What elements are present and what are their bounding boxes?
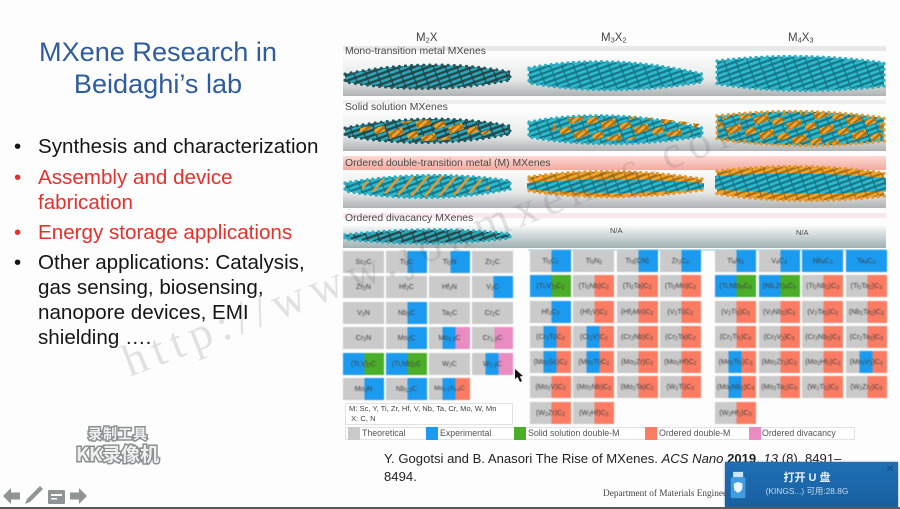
element grid: M4X3: (Nb,Zr)4C3 bbox=[762, 282, 796, 291]
element grid: M2X: W1.3C bbox=[483, 360, 502, 369]
legend: Ordered divacancy bbox=[762, 428, 836, 438]
diagonal watermark: http://www.jonmxenes.com bbox=[115, 96, 764, 386]
row 4: ordered divacancy bbox=[343, 213, 886, 248]
bullet: other applications: Other applications: Catalysis, bbox=[38, 251, 305, 274]
bottom window edge bbox=[0, 507, 900, 509]
element grid: M2X: Zr2C bbox=[485, 258, 500, 267]
slide title bbox=[39, 36, 277, 99]
N/A note M3X2: N/A bbox=[610, 226, 623, 235]
bullet: other applications: nanopore devices, EMI bbox=[38, 301, 249, 324]
element grid: M2X: Sc2C bbox=[355, 258, 372, 267]
row label: ordered double: Ordered double-transition metal (M) MXenes bbox=[345, 158, 551, 169]
slide navigation icons bbox=[3, 486, 87, 504]
column header: M3X2: M3X2 bbox=[601, 32, 627, 44]
USB popup notification bbox=[725, 462, 898, 507]
element grid: M4X3: (Mo2Ti2)C3 bbox=[719, 358, 752, 367]
element grid: M4X3: (V2Ti2)C3 bbox=[721, 308, 750, 317]
element grid: M4X3: (W2Ti2)C3 bbox=[807, 383, 838, 392]
element key note: X: C, N bbox=[351, 414, 376, 422]
slide title: Beidaghi’s lab bbox=[74, 68, 242, 99]
footer department line: Department of Materials Engineering AUBURN UNIVERSITY bbox=[603, 489, 877, 499]
citation bbox=[384, 451, 842, 484]
row 1: mono-transition metal bbox=[343, 46, 886, 96]
citation: Y. Gogotsi and B. Anasori The Rise of MXenes. ACS Nano 2019, 13 (8), 8491– bbox=[384, 451, 841, 466]
element grid: M2X: (Ti,V)2C bbox=[351, 360, 376, 369]
element grid: M3X2 bbox=[529, 249, 702, 425]
bullet: assembly: Assembly and device bbox=[38, 166, 233, 189]
element grid: M3X2: Ti3N2 bbox=[586, 257, 602, 266]
element grid: M2X: Nb1.3C bbox=[396, 385, 417, 394]
element grid: M2X: Ti2N bbox=[443, 258, 456, 267]
element grid: M3X2: (Mo2V)C2 bbox=[535, 383, 566, 392]
slide title: MXene Research in bbox=[39, 36, 277, 67]
element grid: M3X2: (Mo2Nb)C2 bbox=[577, 383, 611, 392]
icon: mouse cursor bbox=[515, 369, 523, 382]
element grid: M2X: Ta2C bbox=[442, 309, 457, 318]
element grid: M2X: Mo1.3C bbox=[438, 334, 461, 343]
legend: Solid solution double-M bbox=[528, 428, 619, 438]
element grid: M4X3: V4C3 bbox=[771, 257, 787, 266]
element grid: M3X2: (Ti2Mn)C2 bbox=[665, 282, 696, 291]
row label: mono-transition: Mono-transition metal MXenes bbox=[345, 46, 486, 57]
element grid: M2X: Nb2C bbox=[398, 309, 415, 318]
element grid: M4X3: (W2Zr2)C3 bbox=[850, 383, 882, 392]
recorder watermark bbox=[76, 424, 160, 467]
element grid: M3X2: (Mo2Ti)C2 bbox=[578, 358, 609, 367]
element grid: M4X3: (Mo2Zr2)C3 bbox=[762, 358, 797, 367]
element grid: M3X2: (Mo2Ta)C2 bbox=[621, 383, 654, 392]
bullet: assembly bbox=[14, 165, 326, 215]
element grid: M3X2: (Ti2Nb)C2 bbox=[579, 282, 609, 291]
element grid: M3X2: (Hf2Mn)C2 bbox=[621, 308, 653, 317]
icon: USB drive bbox=[730, 472, 746, 498]
bullet: assembly: fabrication bbox=[38, 191, 133, 214]
element grid: M3X2: (W2Ti)C2 bbox=[666, 383, 694, 392]
element grid: M4X3 bbox=[714, 249, 888, 425]
element grid: M2X: Mo1.3Y0.6C bbox=[434, 385, 465, 392]
popup drive info: (KINGS...) 可用:28.8G bbox=[766, 486, 848, 496]
recorder watermark: 录制工具 bbox=[88, 424, 148, 444]
element grid: M4X3: (Mo2Hf2)C3 bbox=[805, 358, 840, 367]
element grid: M4X3: (Ti2Nb2)C3 bbox=[806, 282, 839, 291]
element grid: M2X: Cr2C bbox=[485, 309, 500, 318]
element grid: M3X2: (Ti,V)3C2 bbox=[537, 282, 564, 291]
element grid: M2X: Zr2N bbox=[356, 283, 371, 292]
popup heading: 打开 U 盘 bbox=[783, 472, 831, 484]
element grid: M4X3: (Mo2Nb2)C3 bbox=[717, 383, 754, 392]
element grid: M2X: Mo2C bbox=[398, 334, 415, 343]
popup close button: ✕ bbox=[886, 464, 894, 475]
element grid: M3X2: (Cr2Nb)C2 bbox=[621, 333, 653, 342]
element grid: M4X3: (Nb2Ta2)C3 bbox=[849, 308, 884, 317]
element grid: M3X2: (W2Hf)C2 bbox=[579, 409, 608, 418]
element grid: M4X3: (Ti,Nb)4C3 bbox=[719, 282, 752, 291]
element grid: M4X3: (Mo2Ta2)C3 bbox=[761, 383, 797, 392]
element grid: M4X3: (V2Ta2)C3 bbox=[807, 308, 838, 317]
recorder watermark: KK录像机 bbox=[76, 440, 159, 467]
element grid: M2X: Hf2N bbox=[442, 283, 457, 292]
element grid: M2X: Cr1.3C bbox=[483, 334, 502, 343]
element key note: M: Sc, Y, Ti, Zr, Hf, V, Nb, Ta, Cr, Mo, W, Mn bbox=[349, 404, 496, 413]
element grid: M4X3: (W2Hf2)C3 bbox=[719, 409, 752, 418]
element grid: M3X2: (Hf2V)C2 bbox=[580, 308, 607, 317]
figure: MXene structure strips bbox=[343, 46, 886, 251]
element grid: M2X: Hf2C bbox=[399, 283, 414, 292]
element grid: M4X3: (Cr2V2)C3 bbox=[764, 333, 794, 342]
bullet: energy storage: Energy storage applications bbox=[38, 221, 292, 244]
row label: divacancy: Ordered divacancy MXenes bbox=[345, 213, 473, 224]
bullet: other applications: shielding …. bbox=[38, 326, 151, 349]
element grid: M2X: Cr2N bbox=[356, 334, 371, 343]
legend: Theoretical bbox=[362, 428, 406, 438]
grid top rule bbox=[528, 249, 886, 251]
legend: Ordered double-M bbox=[659, 428, 730, 438]
column header: M4X3: M4X3 bbox=[788, 32, 814, 44]
element grid: M2X: Mo2N bbox=[355, 385, 372, 394]
bullet: synthesis: Synthesis and characterization bbox=[38, 135, 318, 158]
element grid: M4X3: (Mo2V2)C3 bbox=[850, 358, 883, 367]
element grid: M2X: V2C bbox=[486, 283, 499, 292]
bullet: other applications: gas sensing, biosensing, bbox=[38, 276, 264, 299]
element grid: M4X3: Ti4N3 bbox=[727, 257, 744, 266]
element grid: M3X2: Hf3C2 bbox=[542, 308, 559, 317]
element grid: M3X2: (Ti2Ta)C2 bbox=[623, 282, 651, 291]
element grid: M2X: V2N bbox=[357, 309, 370, 318]
element grid: M4X3: (Cr2Ta2)C3 bbox=[850, 333, 883, 342]
row 3: ordered double-transition metal bbox=[343, 156, 886, 208]
element grid: M3X2: (V2Ti)C2 bbox=[667, 308, 693, 317]
element grid: M3X2: (Mo2Hf)C2 bbox=[664, 358, 697, 367]
element grid: M3X2: (W2Zr)C2 bbox=[536, 409, 565, 418]
element key note bbox=[345, 403, 513, 425]
N/A note M4X3: N/A bbox=[796, 228, 809, 237]
element grid: M4X3: (V2Nb2)C3 bbox=[763, 308, 795, 317]
column header: M2X: M2X bbox=[416, 32, 437, 44]
element grid: M4X3: Ta4C3 bbox=[857, 257, 875, 266]
element grid: M3X2: (Cr2Ti)C2 bbox=[536, 333, 565, 342]
element grid: M2X bbox=[342, 250, 514, 401]
element grid: M2X: W2C bbox=[442, 360, 457, 369]
legend: Experimental bbox=[440, 428, 491, 438]
element grid: M3X2: (Mo2Sc)C2 bbox=[534, 358, 567, 367]
element grid: M3X2: Ti3C2 bbox=[542, 257, 559, 266]
element grid: M3X2: (Cr2Ta)C2 bbox=[665, 333, 696, 342]
element grid: M4X3: Nb4C3 bbox=[813, 257, 833, 266]
row 2: solid solution bbox=[343, 100, 886, 151]
element grid: M4X3: (Cr2Nb2)C3 bbox=[805, 333, 840, 342]
element grid: M4X3: (Cr2Ti2)C3 bbox=[720, 333, 751, 342]
citation: 8494. bbox=[384, 469, 417, 484]
element grid: M3X2: (Cr2V)C2 bbox=[580, 333, 608, 342]
element grid: M2X: (Ti,Nb)2C bbox=[392, 360, 421, 369]
row label: solid solution: Solid solution MXenes bbox=[345, 102, 448, 113]
bullet: other applications bbox=[14, 250, 326, 350]
element grid: M4X3: (Ti2Ta2)C3 bbox=[850, 282, 882, 291]
element grid: M3X2: Ti3(CN) bbox=[625, 257, 649, 266]
element grid: M3X2: Zr3C2 bbox=[672, 257, 689, 266]
element grid: M3X2: (Mo2Zr)C2 bbox=[621, 358, 653, 367]
element grid: M2X: Ti2C bbox=[400, 258, 413, 267]
